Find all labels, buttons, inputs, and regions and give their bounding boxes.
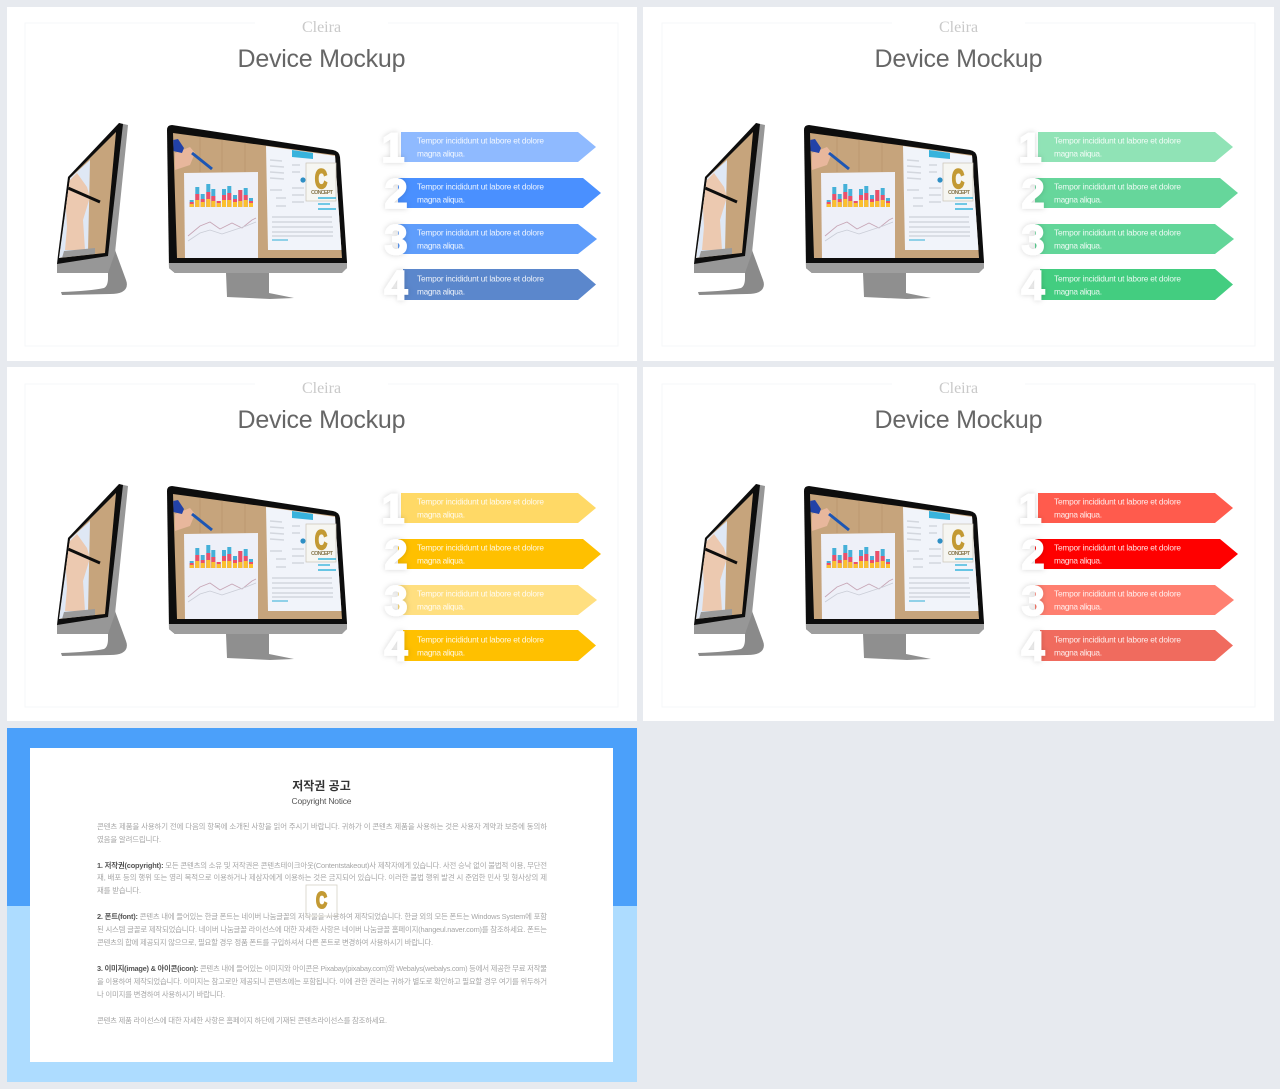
notice body: 콘텐츠 제품 라이선스에 대한 자세한 사항은 홈페이지 하단에 기재된 콘텐츠라이선스를 참조하세요.: [97, 1016, 387, 1025]
arrow 3: Tempor incididunt ut labore et dolore: [417, 228, 544, 238]
arrow 2: [1021, 170, 1238, 217]
screen logo: C: [315, 164, 327, 194]
arrow 1: 1: [381, 124, 405, 171]
heading: Device Mockup: [238, 406, 406, 434]
arrow 4: 4: [1021, 623, 1045, 670]
arrow 3: magna aliqua.: [417, 602, 465, 612]
arrow 3: Tempor incididunt ut labore et dolore: [417, 588, 544, 598]
arrow 4: 4: [1021, 262, 1045, 309]
screen logo: [311, 164, 334, 196]
panel: blue slide: [7, 7, 637, 361]
notice title: 저작권 공고: [292, 778, 351, 793]
arrow 3: 3: [1021, 216, 1045, 263]
panel: yellow slide: [7, 367, 637, 721]
panel: green slide: [643, 7, 1274, 361]
arrow 4: 4: [384, 262, 408, 309]
arrow 2: Tempor incididunt ut labore et dolore: [1054, 542, 1181, 552]
arrow 4: magna aliqua.: [417, 286, 465, 296]
arrow 2: magna aliqua.: [1054, 194, 1102, 204]
arrow 2: 2: [384, 531, 408, 578]
screen logo: CONCEPT: [311, 551, 334, 557]
notice body: 재를 받습니다.: [97, 886, 141, 895]
arrow 4: 4: [384, 623, 408, 670]
arrow 4: Tempor incididunt ut labore et dolore: [417, 634, 544, 644]
notice body: 을 이용하여 제작되었습니다. 이미지는 참고로만 제공되니 콘텐츠에는 포함됩니다. 이에 관한 권리는 귀하가 별도로 확인하고 필요할 경우 여기를 위두하거: [97, 977, 547, 986]
arrow 1: 1: [1018, 485, 1042, 532]
heading: Device Mockup: [874, 406, 1042, 434]
arrow 1: magna aliqua.: [417, 510, 465, 520]
notice body: 1. 저작권(copyright): 모든 콘텐츠의 소유 및 저작권은 콘텐츠테이크아웃(Contentstakeout)사 제작자에게 있습니다. 사전 승낙 없이 불법적 이용, 무단전: [97, 861, 547, 870]
arrow 2: magna aliqua.: [417, 194, 465, 204]
notice body: 나 이미지를 변경하여 사용하시기 바랍니다.: [97, 990, 225, 999]
arrow 1: magna aliqua.: [1054, 510, 1102, 520]
arrow 4: magna aliqua.: [1054, 648, 1102, 658]
arrow 2: [384, 531, 601, 578]
brand: Cleira: [939, 19, 978, 36]
arrow 2: Tempor incididunt ut labore et dolore: [417, 542, 544, 552]
screen logo: [948, 164, 971, 196]
arrow 2: [384, 170, 601, 217]
arrow 1: Tempor incididunt ut labore et dolore: [417, 496, 544, 506]
arrow 2: magna aliqua.: [1054, 556, 1102, 566]
arrow 1: 1: [1018, 124, 1042, 171]
heading: Device Mockup: [238, 45, 406, 73]
arrow 1: 1: [381, 485, 405, 532]
notice body: 였음을 알려드립니다.: [97, 835, 161, 844]
notice body: 콘텐츠의 합에 제공되지 않으므로, 필요할 경우 정품 폰트를 구입하셔서 다른 폰트로 변경하여 사용하시기 바랍니다.: [97, 938, 433, 947]
arrow 1: magna aliqua.: [417, 148, 465, 158]
arrow 3: Tempor incididunt ut labore et dolore: [1054, 588, 1181, 598]
arrow 1: [1018, 124, 1233, 171]
arrow 1: [381, 485, 596, 532]
watermark logo: [306, 885, 337, 916]
arrow 4: [1021, 262, 1233, 309]
screen logo: CONCEPT: [948, 190, 971, 196]
arrow 4: [1021, 623, 1233, 670]
arrow 4: magna aliqua.: [1054, 286, 1102, 296]
screen logo: CONCEPT: [311, 190, 334, 196]
arrow 4: Tempor incididunt ut labore et dolore: [417, 274, 544, 284]
arrow 4: [384, 262, 596, 309]
watermark logo: C: [316, 888, 327, 914]
screen logo: CONCEPT: [948, 551, 971, 557]
notice subtitle: Copyright Notice: [292, 796, 352, 806]
monitors: [57, 484, 347, 660]
arrow 3: [1021, 216, 1234, 263]
arrow 1: Tempor incididunt ut labore et dolore: [1054, 496, 1181, 506]
brand: Cleira: [302, 380, 341, 397]
arrow 1: magna aliqua.: [1054, 148, 1102, 158]
notice body: 된 시스템 글꼴로 제작되었습니다. 네이버 나눔글꼴 라이선스에 대한 자세한 사항은 네이버 나눔글꼴 홈페이지(hangeul.naver.com)를 참조하세요. 폰트는: [97, 925, 547, 934]
arrow 1: Tempor incididunt ut labore et dolore: [1054, 136, 1181, 146]
brand: Cleira: [939, 380, 978, 397]
arrow 1: [381, 124, 596, 171]
arrow 3: [384, 577, 597, 624]
arrow 3: 3: [384, 577, 408, 624]
arrow 1: Tempor incididunt ut labore et dolore: [417, 136, 544, 146]
notice body: 재, 배포 등의 행위 또는 영리 목적으로 이용하거나 제삼자에게 이용하는 것은 금지되어 있습니다. 이러한 불법 행위 발견 시 준엄한 민사 및 형사상의 제: [97, 873, 547, 882]
arrow 2: 2: [1021, 170, 1045, 217]
monitors: [57, 123, 347, 299]
panel: copyright notice: [7, 728, 637, 1082]
arrow 3: 3: [1021, 577, 1045, 624]
arrow 2: 2: [1021, 531, 1045, 578]
arrow 2: magna aliqua.: [417, 556, 465, 566]
heading: Device Mockup: [874, 45, 1042, 73]
arrow 3: [384, 216, 597, 263]
notice body: [97, 822, 547, 1025]
screen logo: C: [952, 525, 964, 555]
arrow 2: Tempor incididunt ut labore et dolore: [1054, 182, 1181, 192]
arrow 2: Tempor incididunt ut labore et dolore: [417, 182, 544, 192]
panel: red slide: [643, 367, 1274, 721]
arrow 3: magna aliqua.: [1054, 602, 1102, 612]
notice body: 2. 폰트(font): 콘텐츠 내에 들어있는 한글 폰트는 네이버 나눔글꼴의 저작물을 사용하여 제작되었습니다. 한글 외의 모든 폰트는 Windows System에 포함: [97, 912, 547, 921]
arrow 1: [1018, 485, 1233, 532]
arrow 4: Tempor incididunt ut labore et dolore: [1054, 634, 1181, 644]
arrow 2: 2: [384, 170, 408, 217]
arrow 3: magna aliqua.: [1054, 240, 1102, 250]
arrow 4: Tempor incididunt ut labore et dolore: [1054, 274, 1181, 284]
arrow 3: [1021, 577, 1234, 624]
brand: Cleira: [302, 19, 341, 36]
arrow 3: Tempor incididunt ut labore et dolore: [1054, 228, 1181, 238]
arrow 3: 3: [384, 216, 408, 263]
arrow 2: [1021, 531, 1238, 578]
notice body: 3. 이미지(image) & 아이콘(icon): 콘텐츠 내에 들어있는 이미지와 아이콘은 Pixabay(pixabay.com)와 Webalys(webalys.com) 등에서 제공한 무료 저작물: [97, 964, 547, 973]
arrow 4: [384, 623, 596, 670]
screen logo: C: [952, 164, 964, 194]
arrow 4: magna aliqua.: [417, 648, 465, 658]
screen logo: C: [315, 525, 327, 555]
screen logo: [948, 525, 971, 557]
screen logo: [311, 525, 334, 557]
monitors: [694, 484, 984, 660]
monitors: [694, 123, 984, 299]
notice body: 콘텐츠 제품을 사용하기 전에 다음의 항목에 소개된 사항을 읽어 주시기 바랍니다. 귀하가 이 콘텐츠 제품을 사용하는 것은 사용자 계약과 보증에 동의하: [97, 822, 547, 831]
arrow 3: magna aliqua.: [417, 240, 465, 250]
